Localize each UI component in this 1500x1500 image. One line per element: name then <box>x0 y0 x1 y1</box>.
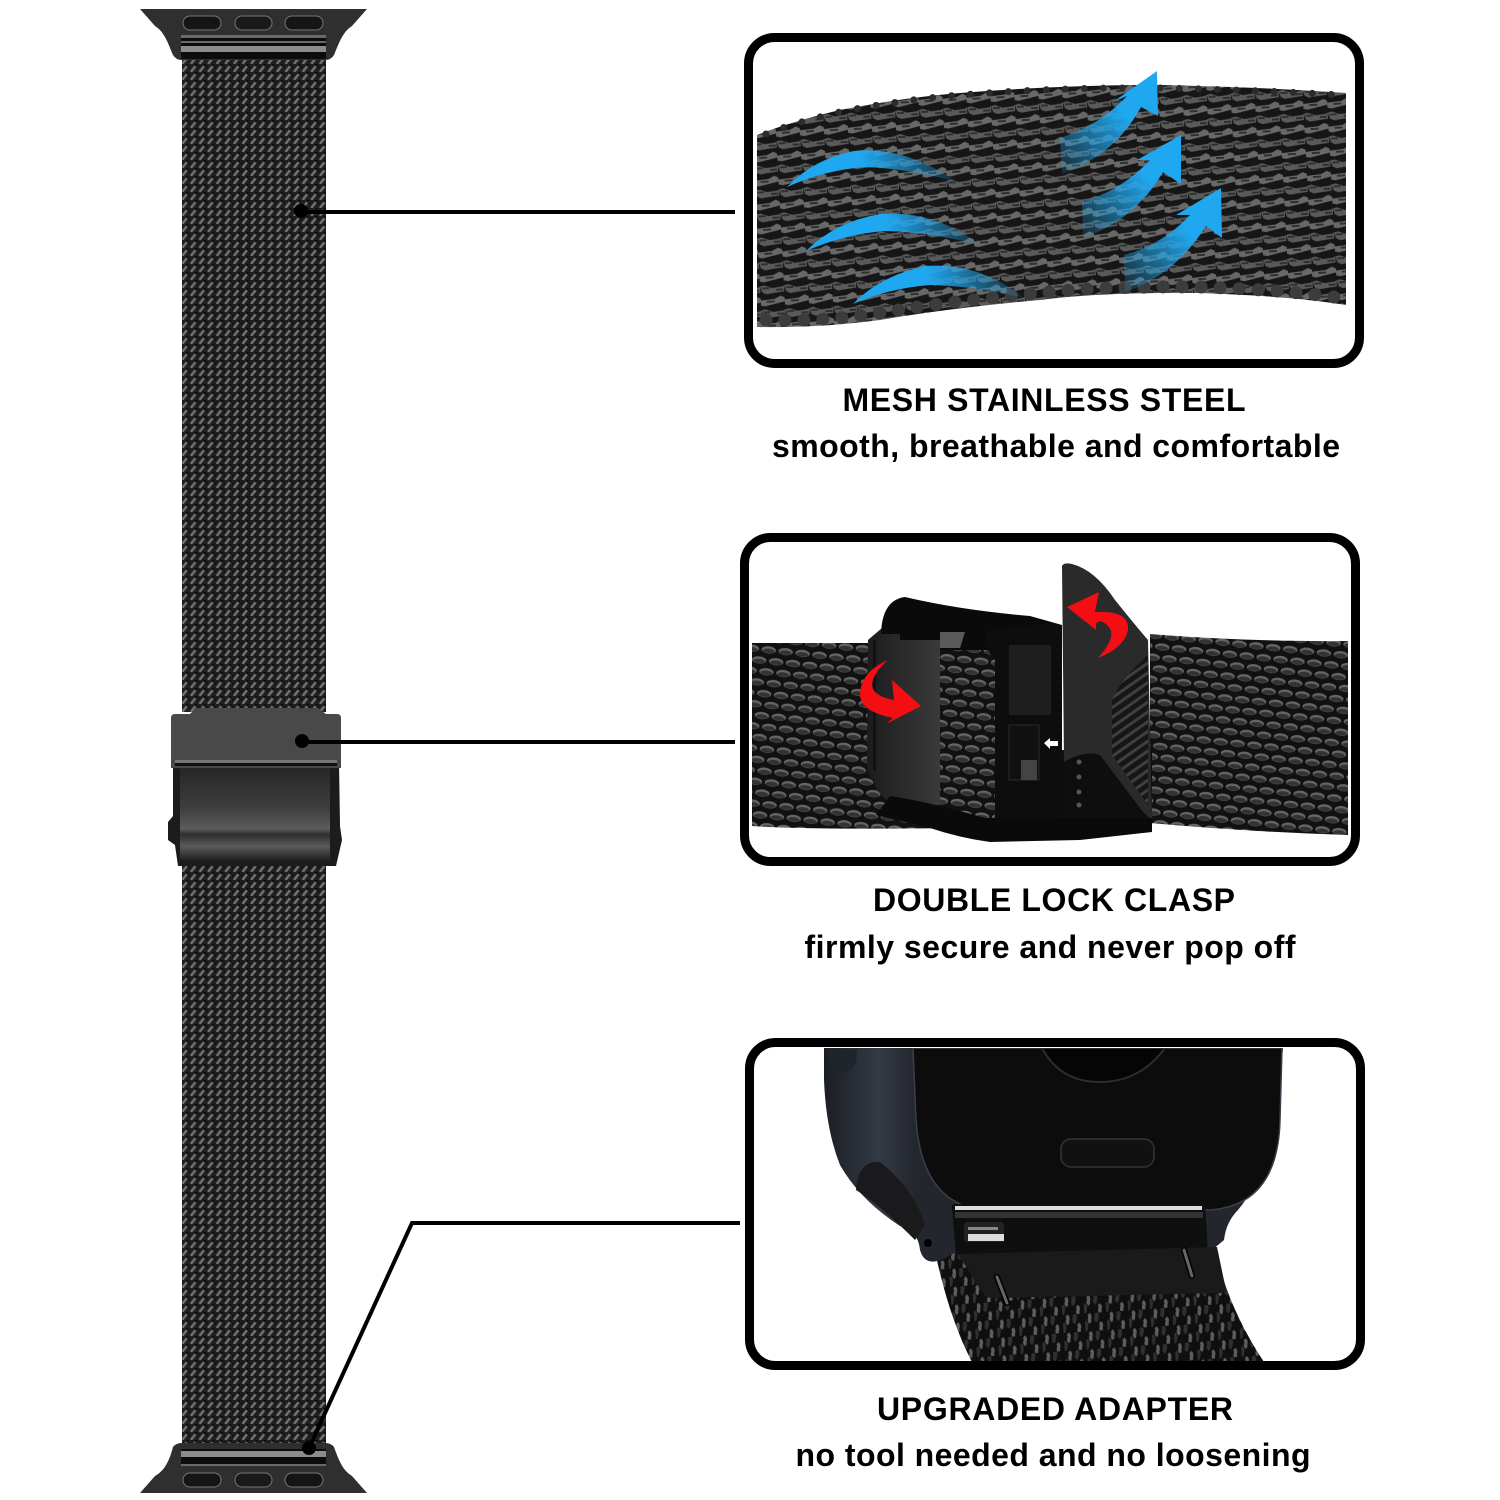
right mesh <box>1150 634 1348 835</box>
description: smooth, breathable and comfortable <box>772 428 1340 464</box>
adapter pin <box>952 1204 1208 1258</box>
arrow up 2 <box>1082 135 1181 238</box>
oval button <box>1061 1139 1154 1167</box>
bottom connector <box>140 1443 367 1493</box>
caption: adapter <box>796 1391 1310 1473</box>
center hinge <box>985 625 1062 825</box>
watch back <box>913 1048 1282 1210</box>
heading: MESH STAINLESS STEEL <box>842 382 1246 418</box>
panel: mesh stainless steel <box>748 38 1360 364</box>
heading: UPGRADED ADAPTER <box>877 1391 1233 1427</box>
watch and adapter illustration <box>824 1048 1283 1362</box>
mesh scalloped edges <box>766 88 1340 320</box>
side button <box>849 1050 857 1070</box>
callout line: adapter <box>302 1223 740 1455</box>
watch band product <box>140 9 367 1493</box>
inner links <box>1060 750 1152 828</box>
sensor ring <box>1042 1048 1165 1082</box>
frame <box>750 1042 1360 1366</box>
side bump <box>856 1162 925 1240</box>
adapter plate <box>958 1247 1226 1298</box>
watch body <box>824 1048 1283 1262</box>
left plate <box>867 628 940 805</box>
air flow swoosh 1 <box>787 150 957 187</box>
clasp <box>168 708 342 866</box>
panel: double lock clasp <box>744 538 1356 862</box>
top buckle <box>881 597 1062 650</box>
caption: clasp <box>804 882 1296 965</box>
small white arrow <box>1044 738 1058 749</box>
upper mesh strap <box>182 58 326 712</box>
callout line: mesh <box>294 204 735 218</box>
top connector <box>140 9 367 60</box>
mesh close-up <box>757 85 1346 327</box>
air flow swoosh 3 <box>853 266 1024 304</box>
panel: upgraded adapter <box>750 1042 1360 1366</box>
middle mesh <box>936 645 998 820</box>
clasp base <box>876 796 1152 842</box>
mesh below adapter <box>936 1245 1264 1362</box>
description: no tool needed and no loosening <box>796 1437 1310 1473</box>
flap texture <box>1112 655 1148 805</box>
arrow up 1 <box>1060 71 1158 174</box>
callout line: clasp <box>295 734 735 748</box>
lower mesh strap <box>182 858 326 1448</box>
heading: DOUBLE LOCK CLASP <box>873 882 1235 918</box>
caption: mesh <box>772 382 1340 464</box>
description: firmly secure and never pop off <box>804 929 1296 965</box>
right flap <box>1062 563 1152 820</box>
buckle highlight <box>940 632 965 648</box>
frame <box>748 38 1360 364</box>
frame <box>744 538 1356 862</box>
air flow swoosh 2 <box>806 214 980 251</box>
arrow up 3 <box>1124 188 1222 292</box>
red arrow left <box>860 660 921 724</box>
red arrow right <box>1067 592 1128 658</box>
left mesh <box>752 643 960 829</box>
